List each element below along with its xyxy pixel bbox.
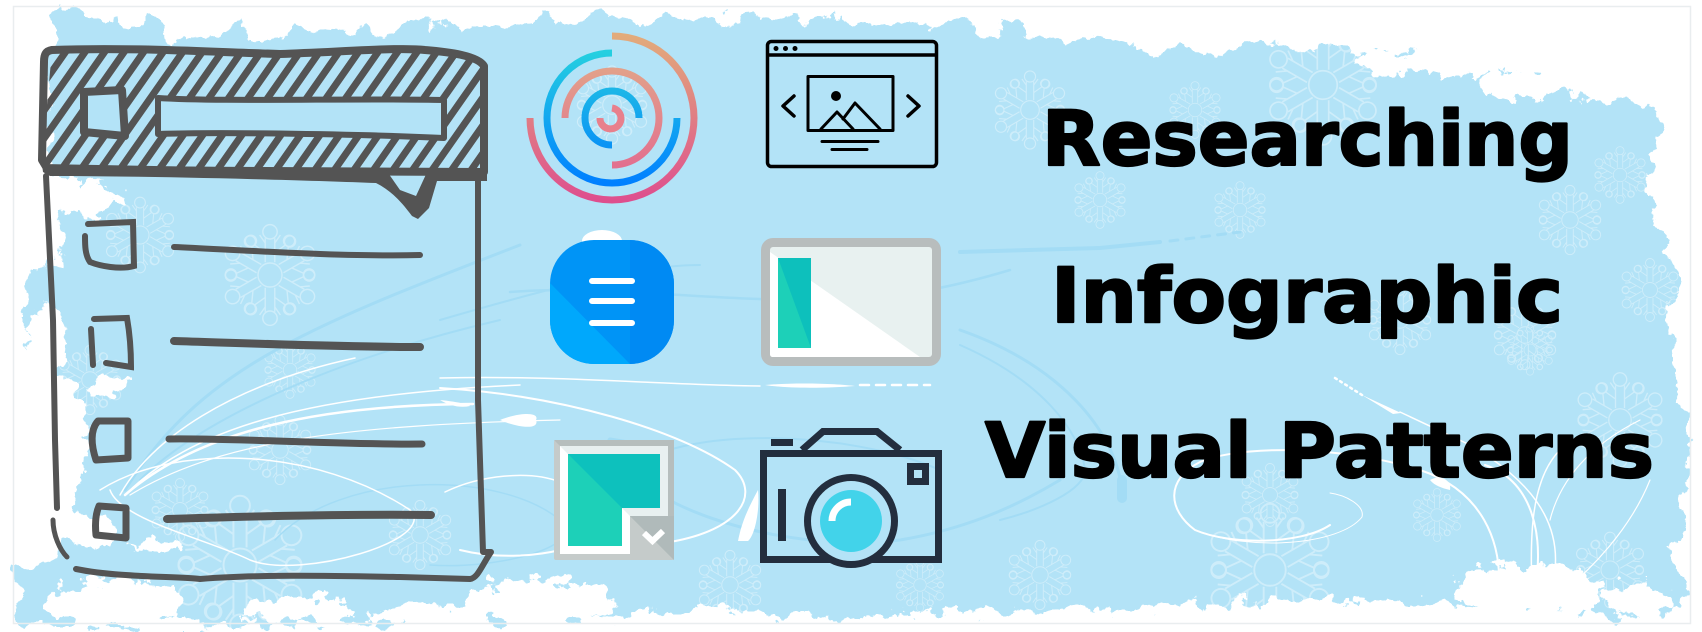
- checklist row 2: [91, 318, 420, 367]
- icon: browser window with image: [768, 42, 936, 166]
- icon: hand-drawn checklist window: [42, 49, 491, 579]
- icon: circular gradient rings: [530, 36, 694, 200]
- icon: blue menu app: [550, 230, 674, 364]
- heading: Visual Patterns: Visual Patterns: [985, 406, 1654, 495]
- icon: folded teal card: [554, 440, 674, 560]
- check mark: [644, 531, 663, 541]
- menu lines: [592, 281, 632, 323]
- background: white swirls: [100, 358, 1650, 600]
- heading: Infographic: Infographic: [1051, 251, 1563, 340]
- background: white droplets: [440, 383, 1450, 541]
- checklist row 1: [85, 222, 420, 268]
- background: blue swirls: [125, 232, 1240, 566]
- checklist row 3: [92, 421, 422, 460]
- sketch header with hatching: [42, 49, 487, 219]
- icon: camera: [764, 432, 938, 564]
- checklist row 4: [95, 506, 431, 538]
- icon: tablet layout: [761, 238, 941, 366]
- heading: Researching: Researching: [1042, 94, 1573, 183]
- sketch window body: [46, 176, 491, 579]
